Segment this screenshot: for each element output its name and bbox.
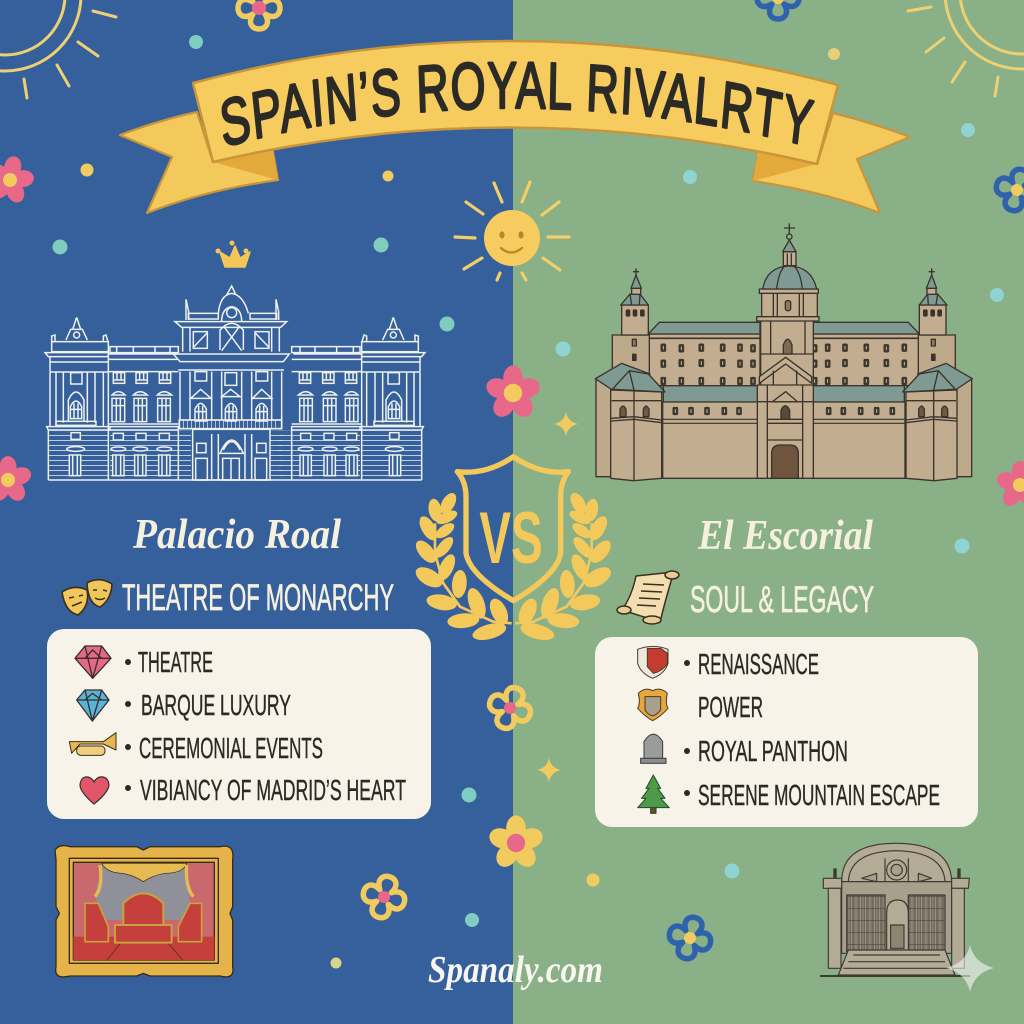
icon: scroll [617, 571, 679, 624]
left laurel [412, 490, 512, 643]
panel: escorial list card [595, 637, 978, 827]
text: theatre [125, 647, 213, 679]
panel: palacio list card [47, 629, 431, 819]
icon: blue gem [77, 690, 109, 721]
VS text: VS [479, 497, 543, 579]
footer: Spanaly.com: Spanaly.com [428, 949, 603, 991]
icon: library archway [820, 843, 970, 976]
title banner [118, 40, 912, 214]
El Escorial illustration [595, 223, 972, 481]
icon: pink gem [75, 646, 111, 678]
text: ceremonial events: CEREMONIAL EVENTS [139, 733, 323, 765]
watermark sparkle [946, 945, 994, 992]
corner sun top right [908, 0, 1024, 96]
icon: pine tree [638, 775, 669, 813]
heading: Palacio Roal: Palacio Roal [132, 512, 341, 558]
shield outline [457, 457, 568, 601]
background: blue panel [0, 0, 513, 1024]
icon: crown [216, 240, 250, 267]
ribbon fold left [213, 150, 278, 180]
title text: SPAIN’S ROYAL RIVALRTY [222, 61, 815, 146]
text: renaissance: RENAISSANCE [698, 649, 819, 681]
text: theatre: THEATRE [138, 647, 213, 679]
text: power: POWER [698, 692, 763, 724]
right ribbon tail [753, 113, 910, 213]
ribbon main [193, 41, 838, 164]
text: royal pantheon: ROYAL PANTHON [698, 736, 848, 768]
text: baroque luxury [125, 690, 291, 722]
ribbon fold right [753, 151, 817, 181]
text: ceremonial events [125, 733, 323, 765]
text: vibrancy of madrid's heart: VIBIANCY OF MADRID’S HEART [140, 775, 406, 807]
sparkles [537, 412, 578, 782]
icon: trumpet [69, 733, 116, 755]
icon: gold crest [638, 689, 668, 721]
smiling sun [455, 182, 569, 280]
text: baroque luxury: BARQUE LUXURY [141, 690, 291, 722]
VS shield with laurel [412, 457, 615, 643]
Palacio Real line drawing [45, 286, 425, 480]
left ribbon tail [120, 112, 278, 213]
right laurel [515, 490, 615, 643]
icon: red coat of arms [638, 646, 668, 678]
text: renaissance [684, 649, 819, 681]
icon: framed throne painting [55, 846, 233, 977]
heading: El Escorial: El Escorial [697, 513, 873, 559]
icon: theatre masks [62, 580, 112, 615]
icon: heart [80, 777, 109, 804]
text: vibrancy of madrid's heart [125, 775, 406, 807]
icon: gravestone [641, 734, 666, 763]
subheading: soul and legacy: SOUL & LEGACY [690, 579, 874, 620]
corner sun top left [0, 0, 116, 98]
text: royal pantheon [684, 736, 848, 768]
subheading: theatre of monarchy: THEATRE OF MONARCHY [122, 577, 394, 618]
background: green panel [513, 0, 1024, 1024]
